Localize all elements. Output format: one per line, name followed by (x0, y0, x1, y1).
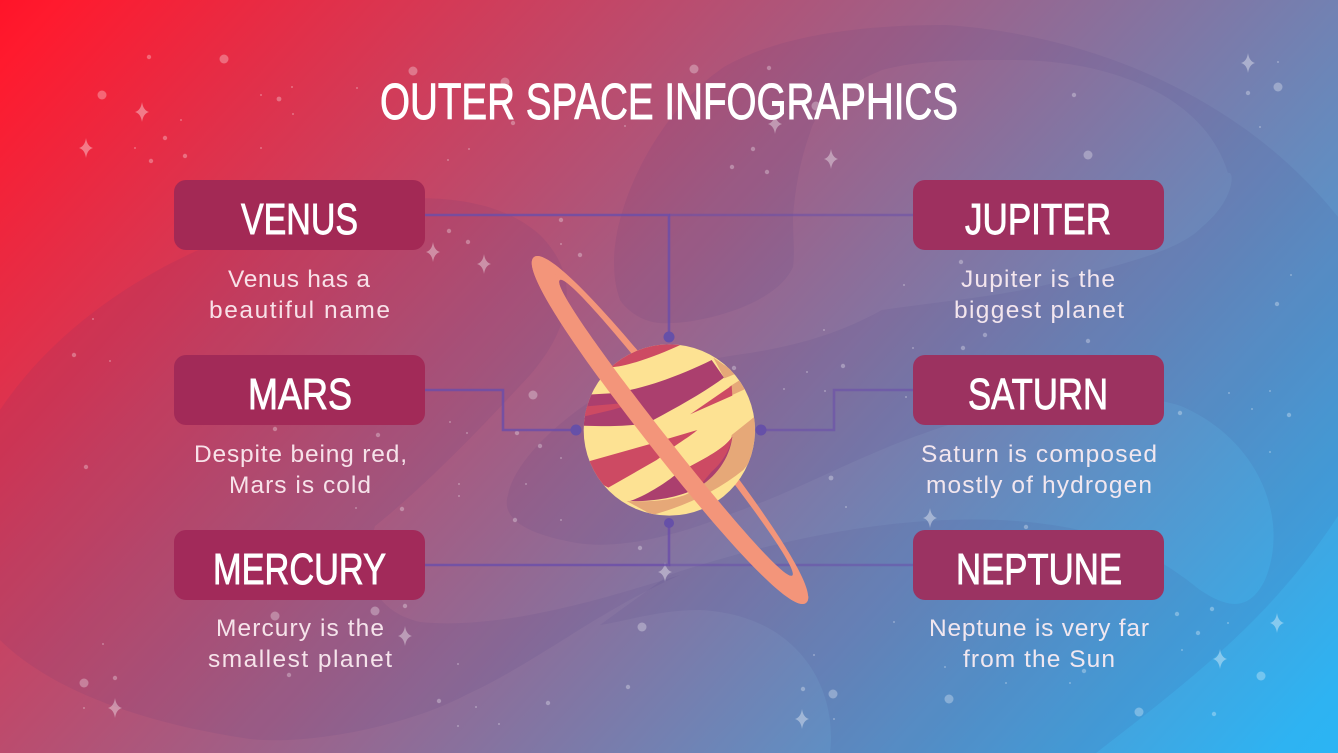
description: Mercury: Mercury is the (216, 615, 384, 642)
planet ring: front (532, 256, 808, 604)
description: Neptune: from the Sun (963, 646, 1115, 673)
description: Jupiter: Jupiter is the (961, 266, 1115, 293)
title: OUTER SPACE INFOGRAPHICS (380, 73, 958, 130)
description: Mars: Despite being red, (194, 441, 407, 468)
heading: Neptune: NEPTUNE (956, 545, 1122, 594)
label box: Jupiter (913, 180, 1164, 250)
description: Mercury: smallest planet (208, 646, 392, 673)
connector end dots (570, 332, 766, 528)
description: Jupiter (954, 266, 1124, 324)
description: Neptune (929, 615, 1149, 673)
description: Mars (194, 441, 407, 499)
connector lines (425, 215, 913, 565)
description: Mercury (208, 615, 392, 673)
heading: Saturn: SATURN (968, 370, 1108, 419)
description: Neptune: Neptune is very far (929, 615, 1149, 642)
planet ring: back (514, 242, 826, 618)
heading: Venus: VENUS (241, 195, 358, 244)
planet body (582, 338, 763, 518)
label box: Saturn (913, 355, 1164, 425)
description: Venus: beautiful name (209, 297, 390, 324)
label box: Mars (174, 355, 425, 425)
label box: Mercury (174, 530, 425, 600)
panel: Venus (174, 180, 425, 324)
heading: Jupiter: JUPITER (965, 195, 1111, 244)
description: Mars: Mars is cold (229, 472, 371, 499)
label box: Venus (174, 180, 425, 250)
description: Venus: Venus has a (228, 266, 370, 293)
label box: Neptune (913, 530, 1164, 600)
panel: Neptune (913, 530, 1164, 673)
panel: Saturn (913, 355, 1164, 499)
heading: Mars: MARS (248, 370, 352, 419)
description: Jupiter: biggest planet (954, 297, 1124, 324)
panel: Mars (174, 355, 425, 499)
description: Saturn: mostly of hydrogen (926, 472, 1152, 499)
description: Venus (209, 266, 390, 324)
panel: Jupiter (913, 180, 1164, 324)
panel: Mercury (174, 530, 425, 673)
ringed planet illustration (532, 256, 808, 604)
description: Saturn (921, 441, 1157, 499)
heading: Mercury: MERCURY (213, 545, 386, 594)
description: Saturn: Saturn is composed (921, 441, 1157, 468)
